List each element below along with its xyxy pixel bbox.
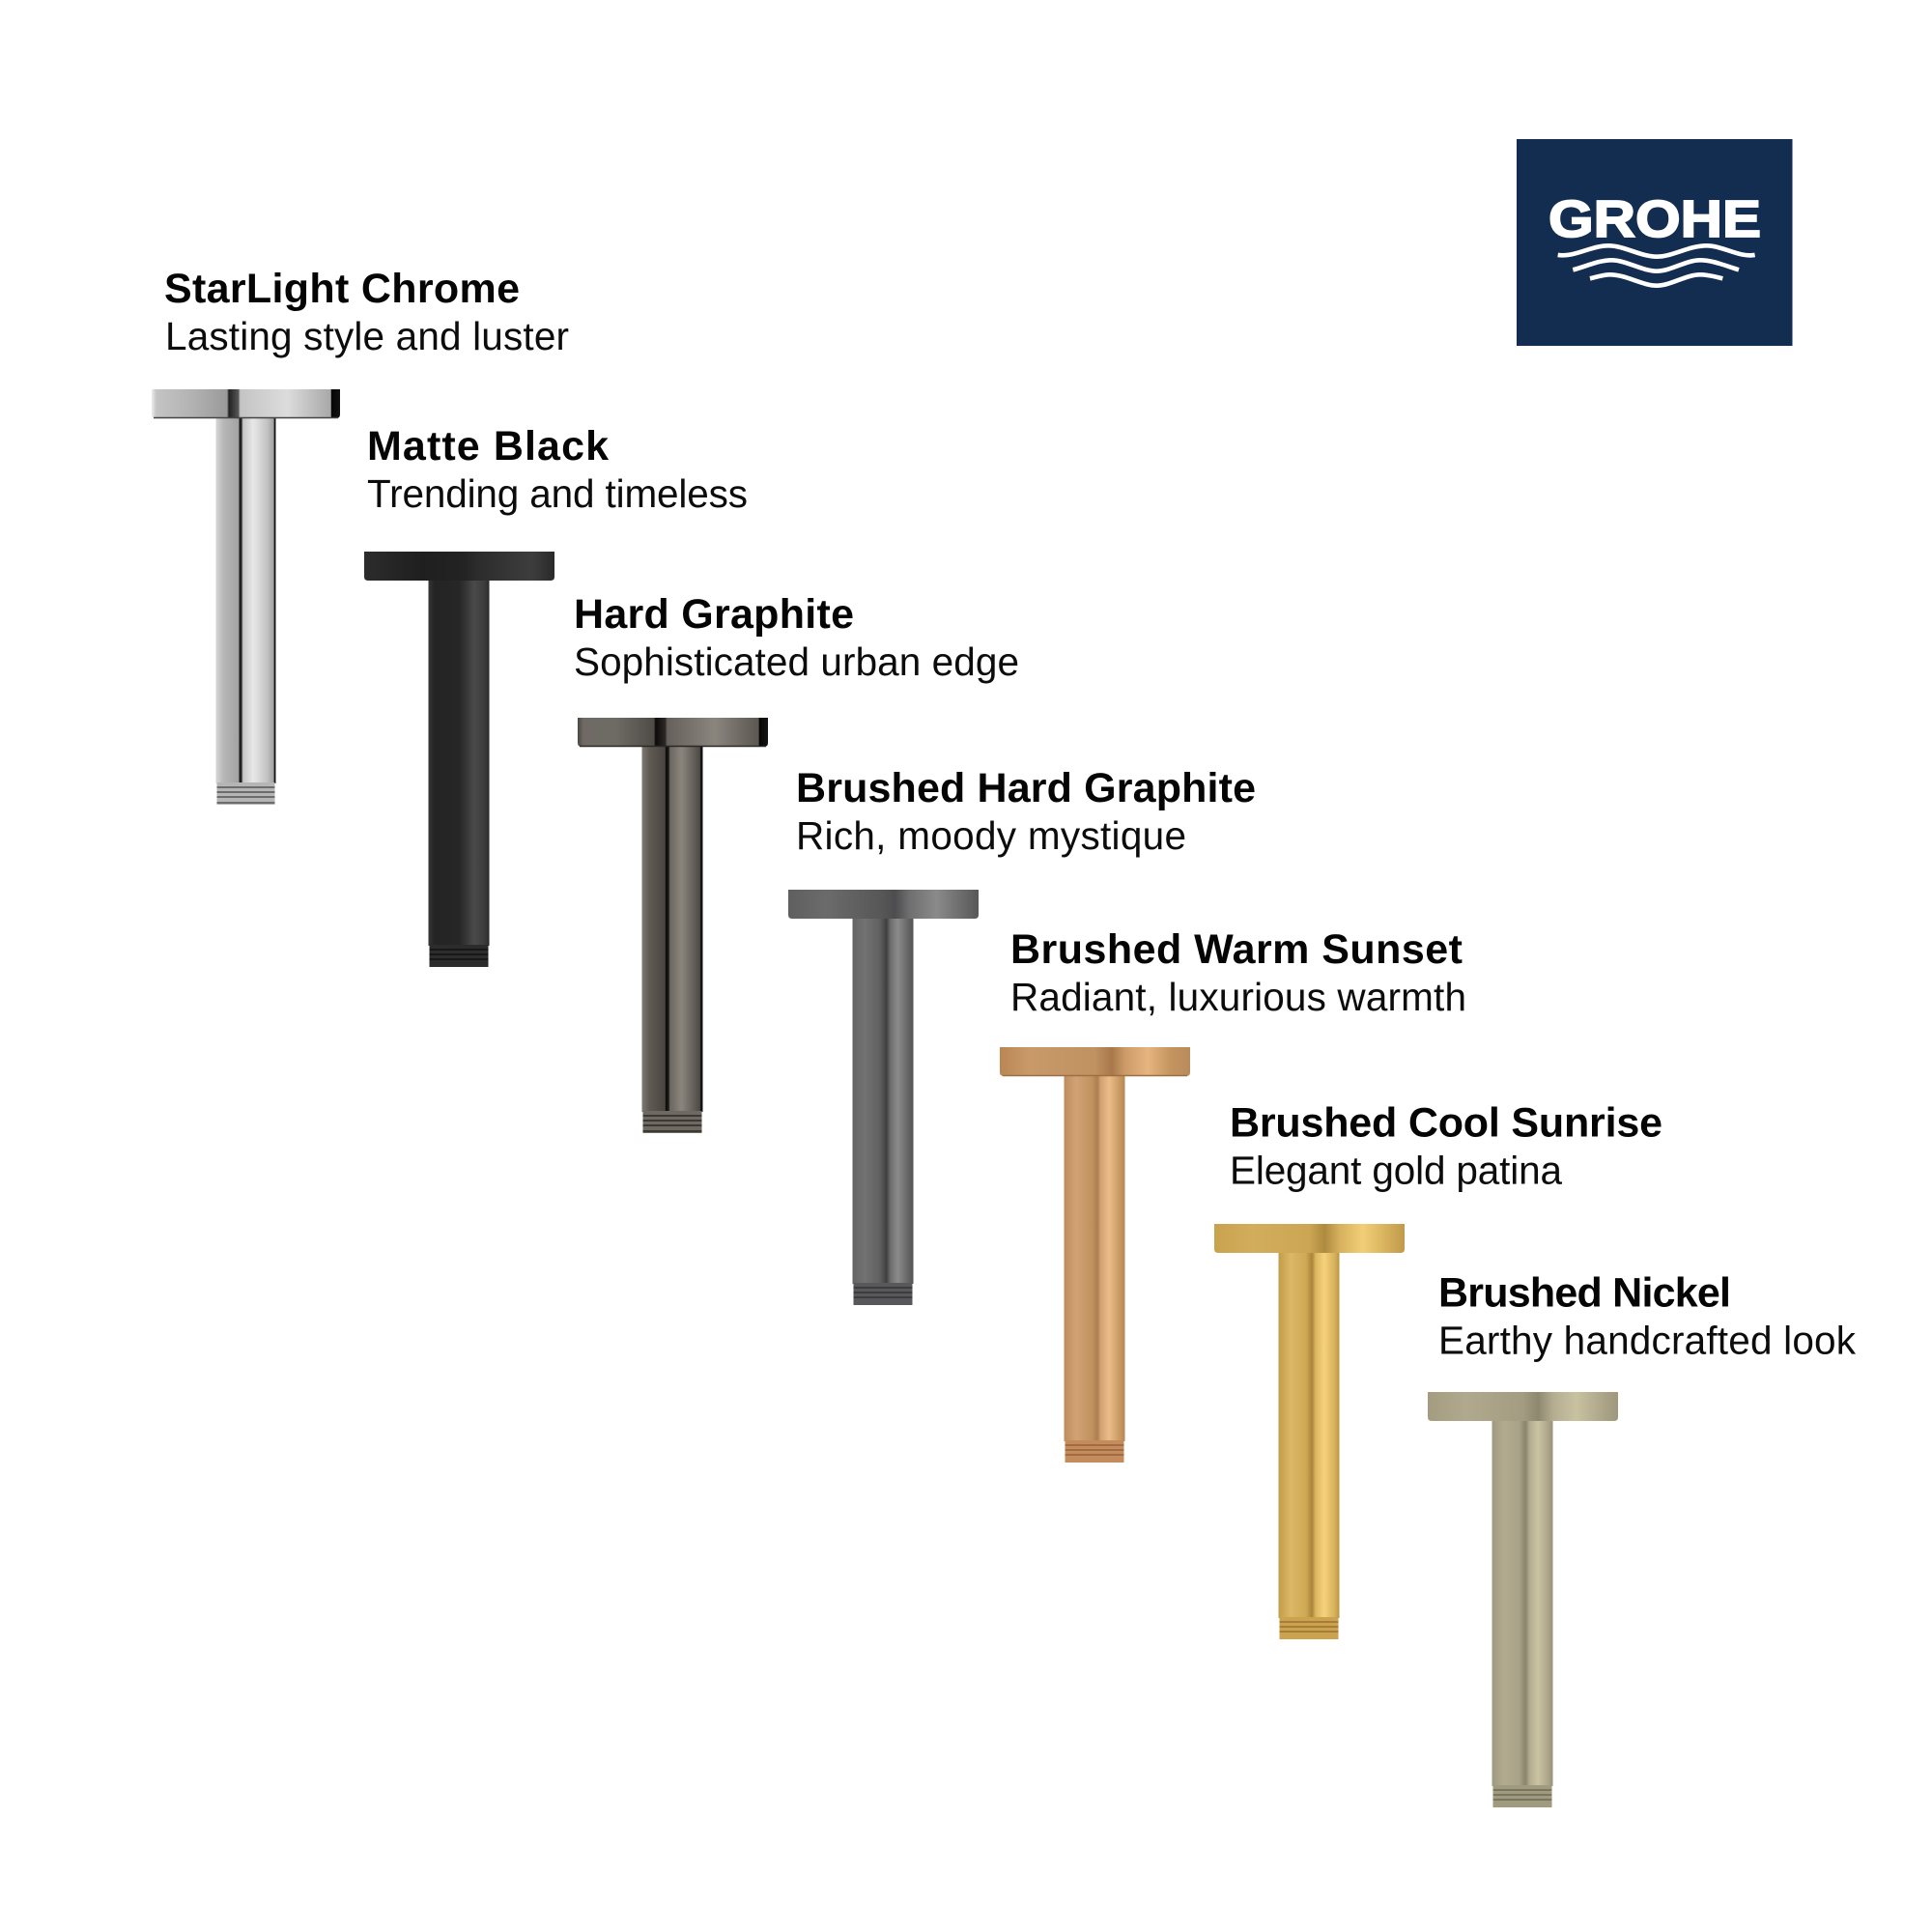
label: Brushed Warm Sunset: Brushed Warm Sunset	[1010, 926, 1463, 973]
label: Brushed Cool Sunrise: Brushed Cool Sunrise	[1230, 1099, 1662, 1146]
label: Matte Black: Matte Black	[367, 423, 609, 469]
bracket: StarLight Chrome	[152, 389, 340, 805]
label: Matte Black	[367, 423, 748, 516]
label: Brushed Hard Graphite: Rich, moody mystique	[796, 813, 1186, 858]
label: Brushed Nickel: Earthy handcrafted look	[1438, 1318, 1857, 1362]
logo: GROHE	[1517, 139, 1793, 346]
bracket: Brushed Hard Graphite	[788, 890, 979, 1305]
label: Brushed Hard Graphite: Brushed Hard Graphite	[796, 765, 1256, 811]
bracket: Brushed Warm Sunset	[1000, 1047, 1190, 1463]
bracket: Hard Graphite	[578, 718, 768, 1133]
label: StarLight Chrome	[164, 266, 569, 358]
label: StarLight Chrome: StarLight Chrome	[164, 266, 520, 312]
label: Brushed Hard Graphite	[796, 765, 1256, 858]
label: Brushed Cool Sunrise	[1230, 1099, 1662, 1192]
label: Matte Black: Trending and timeless	[367, 471, 748, 516]
bracket: Brushed Cool Sunrise	[1214, 1224, 1405, 1639]
bracket: Matte Black	[364, 552, 554, 967]
label: StarLight Chrome: Lasting style and luster	[165, 314, 569, 358]
label: Hard Graphite: Hard Graphite	[574, 591, 854, 638]
bracket: Brushed Nickel	[1428, 1392, 1618, 1807]
label: Brushed Cool Sunrise: Elegant gold patina	[1230, 1148, 1562, 1192]
label: Brushed Nickel: Brushed Nickel	[1438, 1269, 1731, 1316]
label: Brushed Warm Sunset	[1010, 926, 1466, 1019]
label: Brushed Warm Sunset: Radiant, luxurious warmth	[1010, 975, 1466, 1019]
label: Brushed Nickel	[1438, 1269, 1857, 1362]
label: Hard Graphite: Sophisticated urban edge	[574, 639, 1019, 684]
label: Hard Graphite	[574, 591, 1019, 684]
logo: GROHE: GROHE	[1548, 190, 1761, 248]
